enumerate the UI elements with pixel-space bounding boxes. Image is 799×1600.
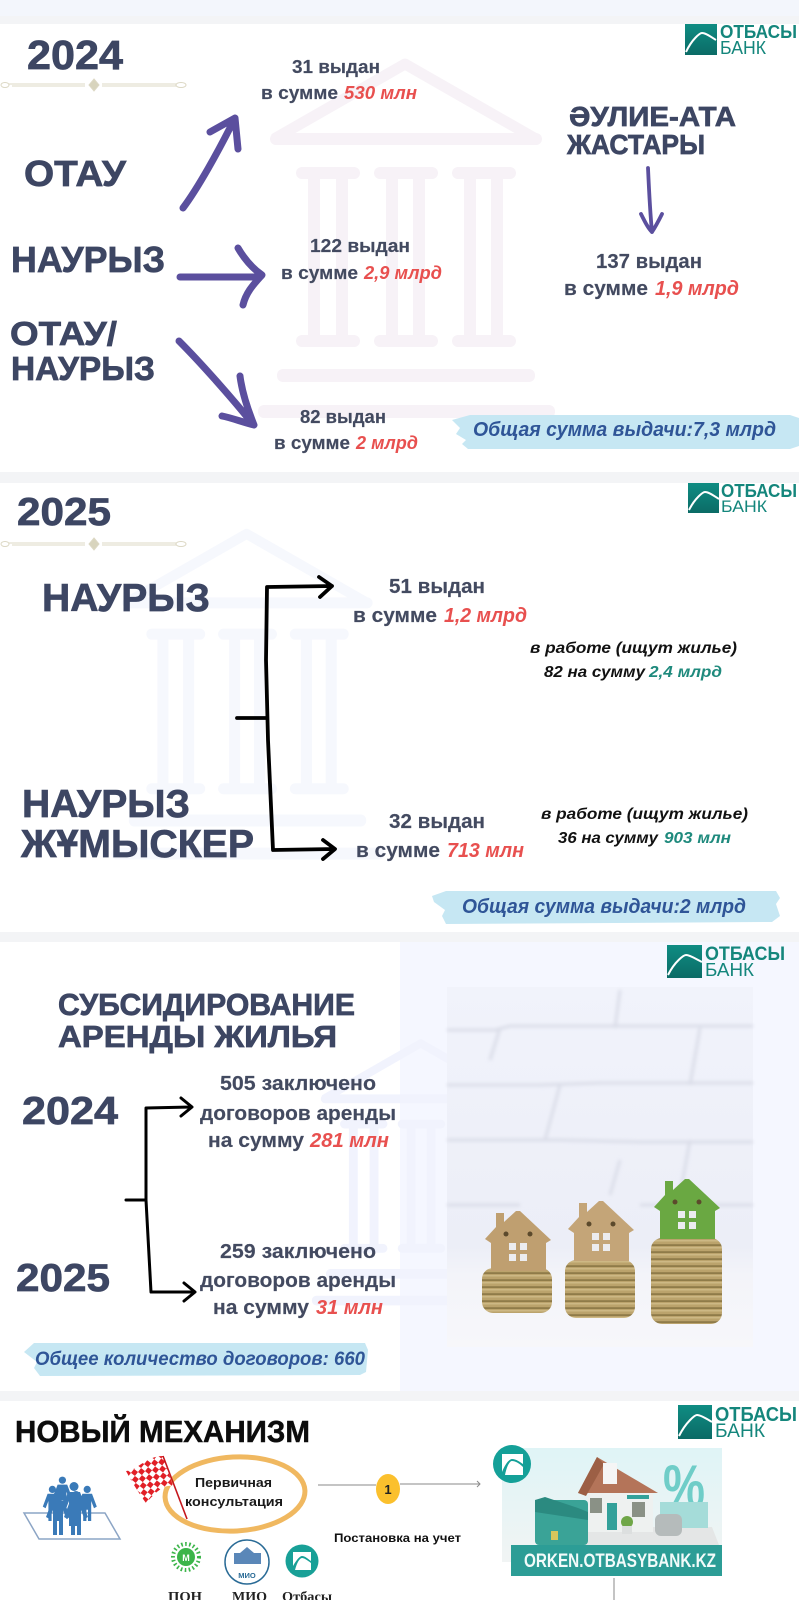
icon: ПОН: М bbox=[182, 1553, 190, 1563]
stat: 122 выдан: в сумме bbox=[281, 263, 358, 283]
logo: Otbasy Bank 2024 bbox=[685, 22, 797, 58]
stat: 259 договоров: 31 млн bbox=[316, 1297, 383, 1319]
stat: 505 договоров: 505 заключено bbox=[220, 1073, 376, 1095]
heading: 2025: 2025 bbox=[17, 491, 111, 534]
label: Отау/Наурыз: ОТАУ/ bbox=[10, 315, 117, 352]
label: Наурыз Жұмыскер: ЖҰМЫСКЕР bbox=[20, 823, 254, 866]
stat: 259 договоров: договоров аренды bbox=[200, 1270, 396, 1292]
logo: Otbasy Bank rent: БАНК bbox=[705, 960, 755, 980]
label: 2025 rent: 2025 bbox=[16, 1257, 110, 1300]
label: Отау: ОТАУ bbox=[24, 153, 127, 194]
icon: checkered flag bbox=[126, 1456, 187, 1519]
stat: 82 выдан: в сумме bbox=[274, 433, 350, 453]
ornament divider 2025 bbox=[1, 538, 186, 550]
heading: rent subsidy: СУБСИДИРОВАНИЕ bbox=[58, 987, 355, 1022]
image: Orken portal banner bbox=[493, 1445, 722, 1576]
icon: people group bbox=[24, 1477, 120, 1539]
logo: Otbasy Bank mechanism bbox=[678, 1404, 797, 1442]
stat: 51 выдан: 51 выдан bbox=[389, 576, 485, 598]
logo: Otbasy Bank 2025: БАНК bbox=[721, 497, 767, 516]
arrow: step 1 connector bbox=[318, 1481, 480, 1487]
icon: Otbasy round badge bbox=[493, 1445, 531, 1483]
note: в работе 36: в работе (ищут жилье) bbox=[541, 806, 748, 823]
callout: total contracts 660: Общее количество договоров: 660 bbox=[35, 1349, 365, 1370]
stat: 31 выдан: 31 выдан bbox=[292, 57, 380, 77]
panel: new mechanism bbox=[0, 1401, 799, 1600]
stat: 137 выдан bbox=[564, 251, 739, 300]
callout: total 2 млрд bbox=[432, 891, 780, 924]
label: Әулие-Ата жастары bbox=[566, 101, 736, 160]
badge: step 1: 1 bbox=[384, 1482, 392, 1497]
coin stack 1 bbox=[482, 1268, 552, 1313]
stat: 51 выдан bbox=[353, 576, 527, 627]
callout: total 2 млрд: Общая сумма выдачи:2 млрд bbox=[462, 896, 746, 918]
stat: 505 договоров: на сумму bbox=[208, 1130, 305, 1152]
badge: step 1 bbox=[376, 1474, 400, 1504]
label: Наурыз Жұмыскер bbox=[20, 783, 254, 866]
arrow: Отау/Наурыз down bbox=[179, 341, 254, 425]
stat: 31 выдан: 530 млн bbox=[344, 83, 417, 103]
stat: 259 договоров: на сумму bbox=[213, 1297, 310, 1319]
illustration: percent sign: % bbox=[663, 1453, 705, 1520]
stat: 82 выдан: 82 выдан bbox=[300, 407, 386, 427]
watermark: bank building 2024 bbox=[258, 64, 555, 418]
heading: rent subsidy bbox=[58, 987, 355, 1054]
arrow: bracket rent bbox=[126, 1098, 195, 1301]
stat: 505 договоров: договоров аренды bbox=[200, 1103, 396, 1125]
stat: 505 договоров bbox=[200, 1073, 396, 1152]
icon: МИО bbox=[225, 1540, 269, 1584]
arrow: bracket 2025 bbox=[237, 577, 335, 859]
stat: 505 договоров: 281 млн bbox=[309, 1130, 389, 1152]
label: Отау/Наурыз bbox=[10, 315, 155, 387]
logo: Otbasy Bank 2024: БАНК bbox=[720, 38, 766, 58]
stat: 32 выдан bbox=[356, 811, 524, 862]
heading: new mechanism: НОВЫЙ МЕХАНИЗМ bbox=[15, 1413, 310, 1449]
arrow: Отау up bbox=[183, 118, 238, 208]
note: в работе 82 bbox=[530, 640, 737, 681]
stat: 82 выдан: 2 млрд bbox=[355, 433, 418, 453]
stat: 51 выдан: в сумме bbox=[353, 605, 437, 627]
house: wood middle bbox=[568, 1201, 634, 1261]
watermark: bank building rent bbox=[312, 1043, 532, 1305]
label: Наурыз: НАУРЫЗ bbox=[11, 239, 165, 280]
stat: 82 выдан bbox=[274, 407, 418, 453]
icon: Отбасы bbox=[286, 1544, 318, 1578]
label: Әулие-Ата жастары: ӘУЛИЕ-АТА bbox=[569, 101, 736, 132]
label: Наурыз Жұмыскер: НАУРЫЗ bbox=[22, 783, 190, 826]
arrow: connector down bbox=[613, 1578, 615, 1600]
callout: total 7,3 млрд bbox=[452, 415, 799, 449]
callout: primary consultation: консультация bbox=[185, 1494, 283, 1509]
heading: rent subsidy: АРЕНДЫ ЖИЛЬЯ bbox=[58, 1019, 337, 1054]
callout: primary consultation bbox=[163, 1453, 307, 1535]
logo: Otbasy Bank 2024: ОТБАСЫ bbox=[720, 22, 797, 42]
stat: 122 выдан: 2,9 млрд bbox=[363, 263, 442, 283]
banner: site address: ORKEN.OTBASYBANK.KZ bbox=[524, 1551, 716, 1572]
arrow: Әулие-Ата down bbox=[641, 168, 662, 232]
callout: primary consultation: Первичная bbox=[195, 1475, 272, 1490]
watermark: bank building 2025 bbox=[111, 534, 385, 860]
note: в работе 82: 82 на сумму bbox=[544, 664, 646, 681]
stat: 32 выдан: в сумме bbox=[356, 840, 440, 862]
label: registration: Постановка на учет bbox=[334, 1531, 461, 1545]
house: green bbox=[654, 1179, 720, 1239]
stat: 31 выдан bbox=[261, 57, 417, 103]
illustration: coins bbox=[655, 1514, 682, 1536]
stat: 51 выдан: 1,2 млрд bbox=[444, 605, 527, 627]
stat: 137 выдан: 137 выдан bbox=[596, 251, 702, 273]
banner: site address bbox=[511, 1545, 722, 1576]
ornament divider 2024 bbox=[1, 79, 186, 91]
stat: 32 выдан: 32 выдан bbox=[389, 811, 485, 833]
icon: ПОН bbox=[173, 1544, 199, 1570]
stat: 259 договоров: 259 заключено bbox=[220, 1241, 376, 1263]
illustration: briefcase bbox=[535, 1497, 588, 1545]
label: Әулие-Ата жастары: ЖАСТАРЫ bbox=[566, 129, 705, 160]
note: в работе 36: 36 на сумму bbox=[558, 830, 659, 847]
stat: 32 выдан: 713 млн bbox=[447, 840, 524, 862]
panel: rent subsidy bbox=[0, 942, 799, 1391]
stat: 137 выдан: 1,9 млрд bbox=[655, 278, 739, 300]
note: в работе 82: 2,4 млрд bbox=[648, 664, 722, 681]
note: в работе 36 bbox=[541, 806, 748, 847]
house: wood left bbox=[485, 1211, 551, 1271]
stat: 259 договоров bbox=[200, 1241, 396, 1319]
note: в работе 82: в работе (ищут жилье) bbox=[530, 640, 737, 657]
illustration: platform bbox=[570, 1527, 719, 1545]
label: 2024 rent: 2024 bbox=[22, 1090, 118, 1133]
arrow: Наурыз right bbox=[180, 248, 262, 305]
logo: Otbasy Bank mechanism: БАНК bbox=[715, 1421, 765, 1442]
coin stack 2 bbox=[565, 1260, 635, 1318]
stat: 31 выдан: в сумме bbox=[261, 83, 338, 103]
label: Наурыз 2025: НАУРЫЗ bbox=[42, 577, 210, 620]
panel: 2025 issuance bbox=[0, 481, 799, 932]
logo: Otbasy Bank rent: ОТБАСЫ bbox=[705, 944, 785, 965]
stat: 122 выдан bbox=[281, 236, 442, 283]
label: Отау/Наурыз: НАУРЫЗ bbox=[11, 350, 155, 387]
illustration: house bbox=[578, 1457, 658, 1534]
icon: МИО: МИО bbox=[238, 1571, 256, 1580]
callout: total 7,3 млрд: Общая сумма выдачи:7,3 млрд bbox=[473, 419, 776, 441]
heading: 2024: 2024 bbox=[27, 32, 123, 78]
note: в работе 36: 903 млн bbox=[664, 830, 731, 847]
top band bbox=[0, 0, 799, 16]
coin stack 3 bbox=[651, 1238, 722, 1324]
callout: total contracts 660 bbox=[24, 1343, 368, 1376]
stat: 122 выдан: 122 выдан bbox=[310, 236, 410, 256]
logo: Otbasy Bank rent bbox=[667, 944, 785, 980]
logo: Otbasy Bank 2025 bbox=[688, 481, 797, 516]
panel: 2024 issuance bbox=[0, 22, 799, 472]
photo: houses on coin stacks bbox=[447, 987, 753, 1347]
stat: 137 выдан: в сумме bbox=[564, 278, 648, 300]
